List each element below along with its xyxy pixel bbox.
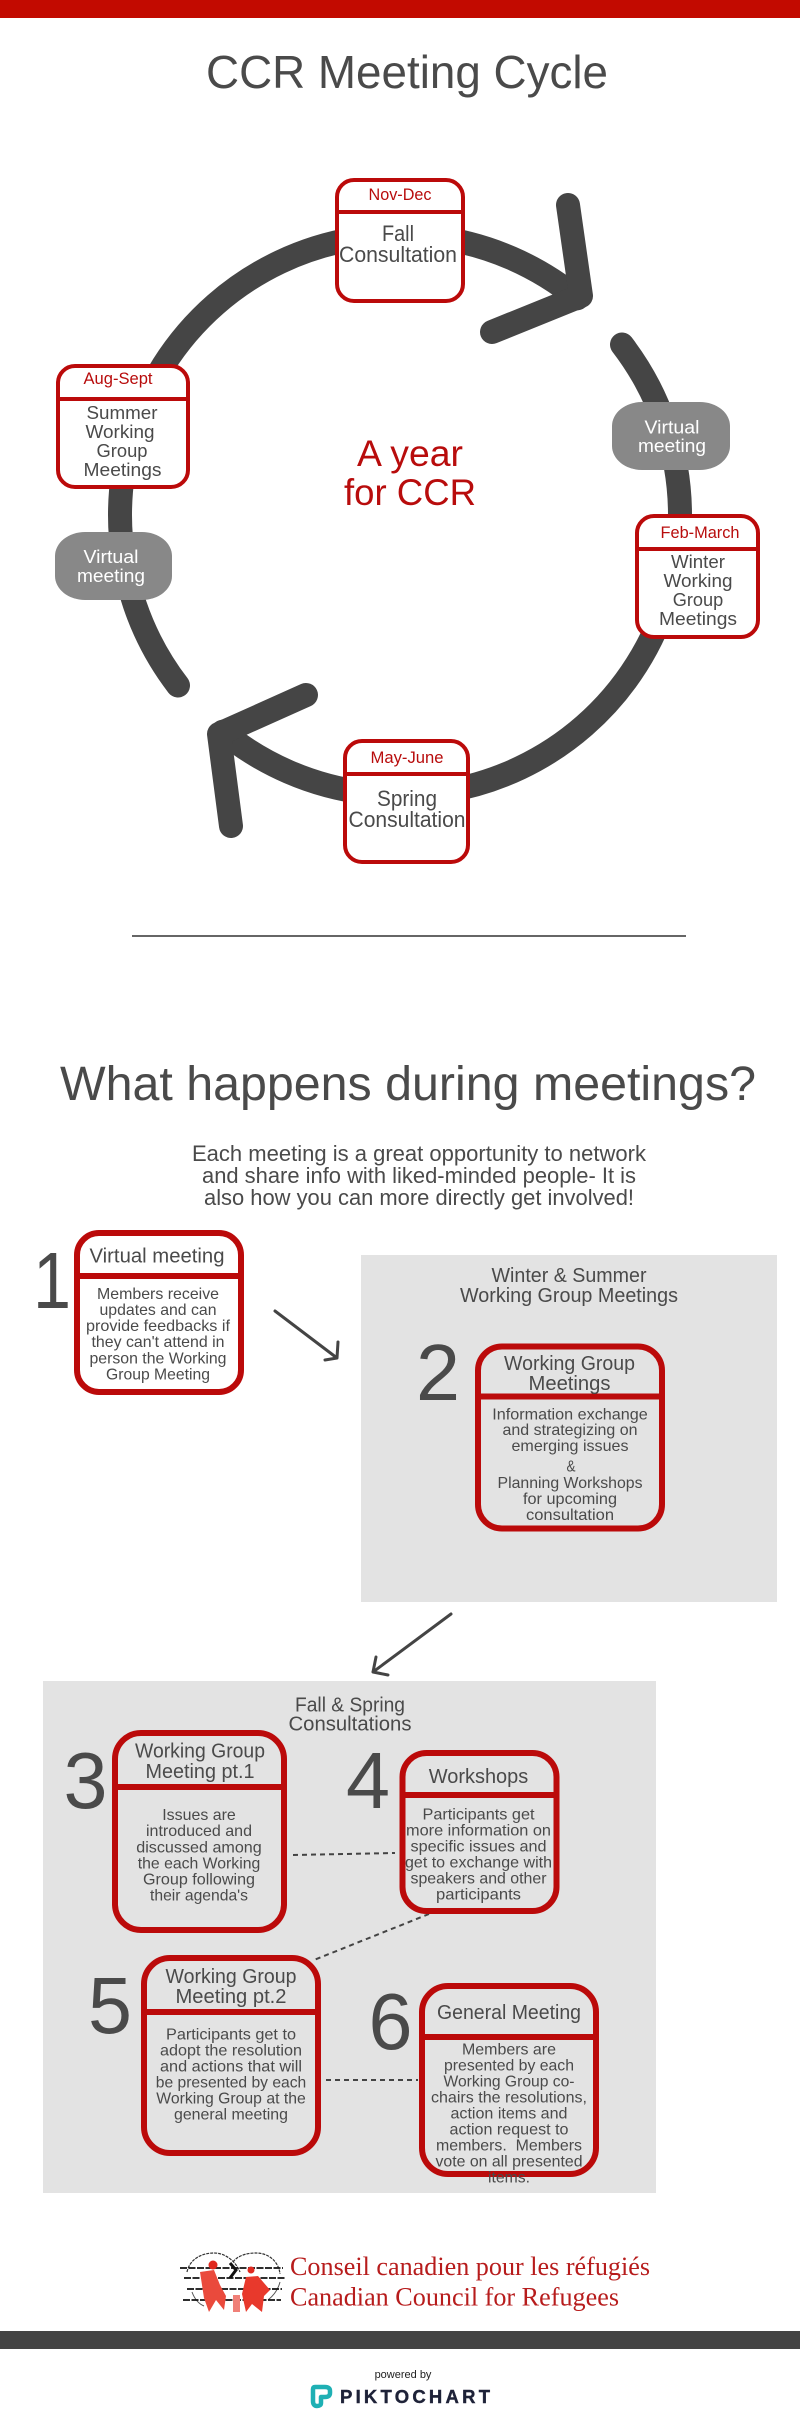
panel heading: Winter & Summer — [492, 1265, 647, 1287]
card 3: Group following — [143, 1872, 255, 1888]
card 6: members. Members — [436, 2138, 582, 2154]
number 1: 1 — [33, 1236, 71, 1325]
card 5: Working Group — [166, 1966, 296, 1988]
top red bar — [0, 0, 800, 18]
intro text: and share info with liked-minded people- It is — [202, 1163, 636, 1188]
intro text — [192, 1141, 647, 1210]
card 4: speakers and other — [410, 1870, 547, 1888]
connector: 4 to 5 — [314, 1914, 429, 1960]
card 6: presented by each — [444, 2058, 574, 2074]
card 5: adopt the resolution — [160, 2042, 302, 2060]
footer: powered by Piktochart: powered by — [375, 2369, 432, 2381]
pill: virtual meeting right: Virtual — [644, 416, 700, 438]
card 1 — [77, 1233, 241, 1392]
pill: virtual meeting left: Virtual — [84, 546, 138, 567]
pill: virtual meeting right: meeting — [638, 435, 706, 456]
pill: virtual meeting right — [612, 402, 730, 470]
card 6: General Meeting — [437, 2002, 581, 2024]
card 5: and actions that will — [160, 2058, 302, 2076]
logo: Canadian Council for Refugees — [180, 2252, 650, 2312]
card: May-June Spring Consultation: Spring — [377, 786, 437, 811]
card 3: Meeting pt.1 — [146, 1761, 254, 1783]
cycle diagram — [55, 180, 758, 862]
panel heading — [460, 1265, 678, 1307]
card 2: emerging issues — [512, 1438, 628, 1455]
icon: Piktochart mark — [313, 2387, 330, 2406]
card: May-June Spring Consultation: Consultation — [348, 807, 466, 832]
card 6: Working Group co- — [444, 2074, 574, 2090]
panel: fall and spring consultations — [43, 1681, 656, 2193]
card 2 — [478, 1346, 662, 1528]
number 3: 3 — [64, 1736, 108, 1825]
organisation name: Conseil canadien pour les réfugiés — [290, 2252, 650, 2281]
card 3 — [115, 1733, 284, 1930]
card 1: Group Meeting — [106, 1366, 210, 1384]
card 1: Members receive — [97, 1286, 219, 1303]
card 4: get to exchange with — [405, 1854, 552, 1872]
card 2: Planning Workshops — [498, 1475, 642, 1492]
panel heading: Consultations — [288, 1714, 412, 1736]
card 5: Working Group at the — [156, 2090, 306, 2108]
card 4: Participants get — [422, 1806, 535, 1824]
center label: A year for CCR: A year — [357, 433, 463, 474]
intro text: also how you can more directly get involved! — [204, 1185, 634, 1210]
center label: A year for CCR — [344, 433, 476, 513]
card: Feb-March Winter Working Group Meetings: Feb-March — [660, 524, 740, 542]
card 1: updates and can — [100, 1302, 216, 1319]
panel heading — [288, 1694, 412, 1736]
card: May-June Spring Consultation: May-June — [370, 749, 444, 767]
card 3: introduced and — [146, 1823, 252, 1840]
card 4 — [402, 1753, 556, 1911]
card 6: Members are — [462, 2042, 556, 2058]
card 2: Working Group — [504, 1353, 635, 1375]
panel heading: Working Group Meetings — [460, 1285, 678, 1307]
card: Feb-March Winter Working Group Meetings — [637, 516, 758, 637]
card 6: vote on all presented — [436, 2154, 582, 2170]
card 5: be presented by each — [156, 2074, 306, 2092]
title: CCR Meeting Cycle — [206, 46, 608, 98]
bottom dark bar — [0, 2331, 800, 2349]
step 1: virtual meeting — [33, 1233, 241, 1392]
connector: 3 to 4 — [293, 1853, 395, 1855]
card 6: chairs the resolutions, — [431, 2090, 587, 2106]
card 3: Working Group — [135, 1740, 265, 1762]
center label: A year for CCR: for CCR — [344, 472, 476, 513]
panel: winter and summer working group meetings — [361, 1255, 777, 1602]
card: Nov-Dec Fall Consultation: Consultation — [339, 242, 457, 267]
arrow: lower arc — [219, 344, 680, 826]
intro text: Each meeting is a great opportunity to network — [192, 1141, 647, 1166]
card 6: action items and — [450, 2106, 568, 2122]
heading: What happens during meetings?: What happens during meetings? — [60, 1058, 756, 1111]
card 2: Information exchange — [492, 1406, 648, 1424]
card 2: and strategizing on — [502, 1422, 638, 1439]
panel heading: Fall & Spring — [295, 1694, 405, 1716]
arrow: step 2 to consultations — [373, 1614, 451, 1675]
card 3: the each Working — [138, 1856, 260, 1872]
card 5: Meeting pt.2 — [176, 1986, 286, 2008]
card 1: person the Working — [90, 1350, 226, 1368]
wordmark: PIKTOCHART — [340, 2386, 491, 2407]
card 3: Issues are — [162, 1807, 236, 1824]
arrow: step 1 to step 2 — [275, 1311, 338, 1360]
card 2: consultation — [526, 1507, 614, 1524]
pill: virtual meeting left — [55, 532, 172, 600]
card: May-June Spring Consultation — [345, 741, 468, 862]
card 6: action request to — [450, 2122, 569, 2138]
card 5: Participants get to — [166, 2026, 296, 2044]
card 2: & — [566, 1458, 576, 1476]
card 4: specific issues and — [410, 1838, 546, 1856]
number 4: 4 — [346, 1736, 390, 1825]
number 5: 5 — [88, 1961, 132, 2050]
card 4: more information on — [406, 1822, 551, 1840]
number 6: 6 — [368, 1977, 412, 2066]
card: Aug-Sept Summer Working Group Meetings — [58, 366, 188, 487]
footer: powered by Piktochart — [313, 2369, 491, 2407]
card 4: participants — [436, 1886, 521, 1904]
card: Aug-Sept Summer Working Group Meetings: Meetings — [84, 459, 162, 480]
icon: globe, barbed wire and figures — [180, 2253, 286, 2312]
card: Aug-Sept Summer Working Group Meetings: Aug-Sept — [84, 370, 153, 388]
card 1: provide feedbacks if — [86, 1318, 231, 1335]
card 6: items. — [488, 2170, 530, 2186]
card: Feb-March Winter Working Group Meetings: Working — [664, 570, 732, 591]
card: Nov-Dec Fall Consultation: Nov-Dec — [368, 186, 432, 204]
card 3: their agenda's — [150, 1888, 248, 1904]
card 6 — [422, 1986, 596, 2186]
organisation name: Canadian Council for Refugees — [290, 2282, 619, 2312]
organisation name — [290, 2252, 650, 2312]
card: Nov-Dec Fall Consultation: Fall — [382, 221, 414, 246]
card 1: Virtual meeting — [90, 1246, 224, 1268]
card 2: Meetings — [528, 1373, 610, 1395]
card: Feb-March Winter Working Group Meetings: Group — [673, 589, 723, 610]
connector: 5 to 6 — [326, 2079, 418, 2081]
card: Feb-March Winter Working Group Meetings: Winter — [671, 551, 725, 572]
arrow: upper arc — [120, 205, 581, 686]
card 1: they can't attend in — [92, 1334, 224, 1351]
section divider line — [132, 935, 686, 937]
card: Aug-Sept Summer Working Group Meetings: Working — [86, 421, 154, 442]
card 5: general meeting — [174, 2106, 288, 2124]
card 4: Workshops — [429, 1766, 528, 1788]
card: Feb-March Winter Working Group Meetings: Meetings — [659, 608, 737, 629]
card 2: for upcoming — [523, 1491, 617, 1508]
card: Aug-Sept Summer Working Group Meetings: Group — [96, 440, 148, 461]
card: Aug-Sept Summer Working Group Meetings: Summer — [86, 402, 158, 423]
number 2: 2 — [416, 1328, 460, 1417]
card 5 — [144, 1958, 318, 2153]
pill: virtual meeting left: meeting — [77, 565, 145, 586]
card: Nov-Dec Fall Consultation — [337, 180, 463, 301]
card 3: discussed among — [136, 1840, 262, 1856]
